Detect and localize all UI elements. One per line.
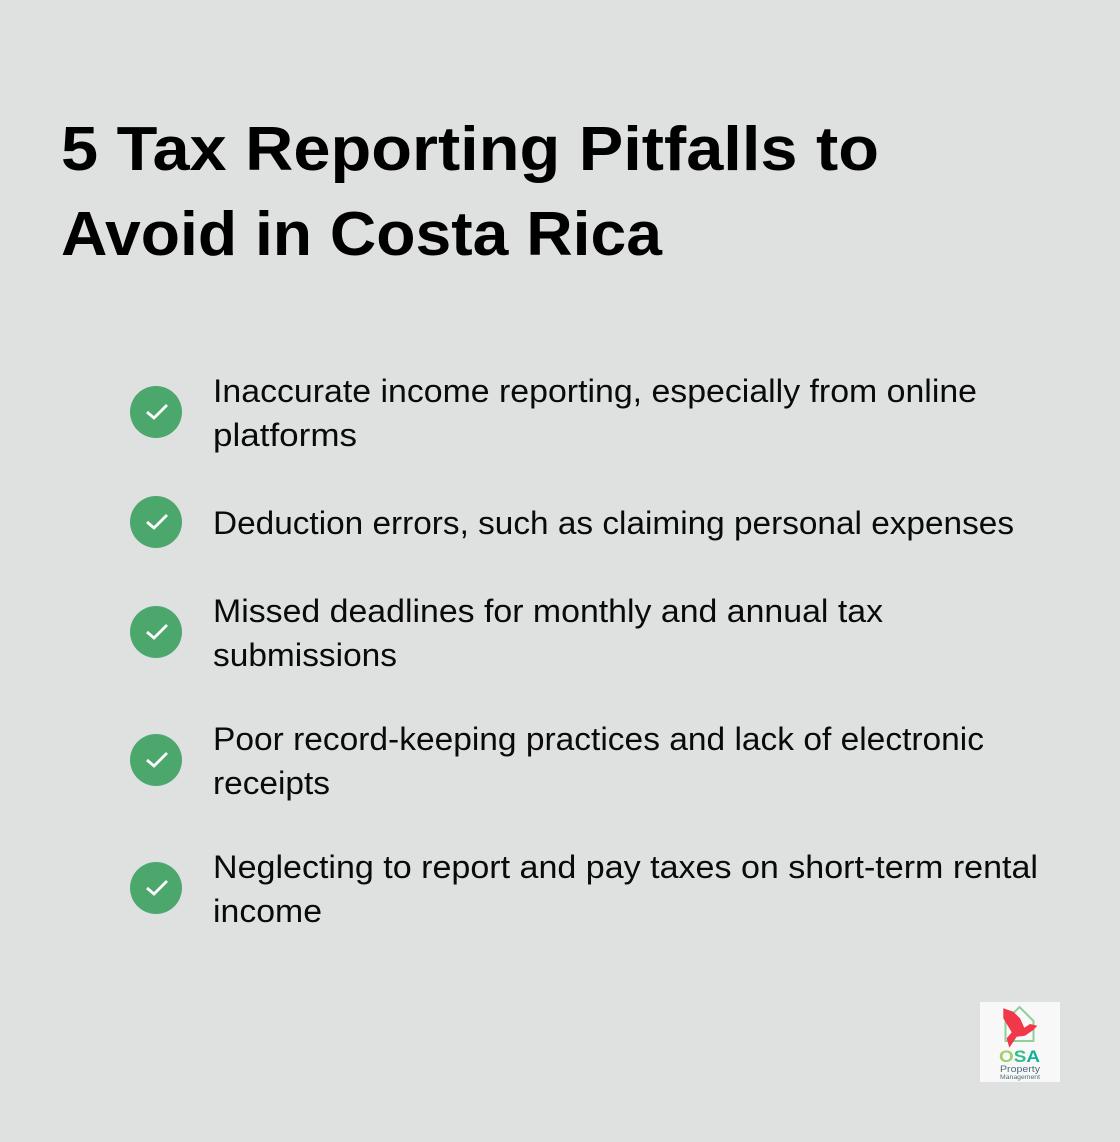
list item 1 (130, 373, 977, 453)
text: item 3: submissions (213, 637, 397, 673)
text: item 3 (213, 593, 883, 673)
icon: red bird (1003, 1008, 1037, 1048)
text: item 1 (213, 373, 977, 453)
list item 5 (130, 849, 1038, 929)
title: Avoid in Costa Rica (61, 200, 663, 269)
icon: house outline (1006, 1007, 1034, 1041)
text: item 1: platforms (213, 417, 357, 453)
title (61, 115, 879, 269)
text: item 5: income (213, 893, 322, 929)
icon: check 4 (130, 734, 182, 786)
text: item 2: Deduction errors, such as claiming personal expenses (213, 505, 1014, 541)
logo: OSA Property Management (980, 1002, 1060, 1082)
icon: check 3 (130, 606, 182, 658)
icon: check 1 (130, 386, 182, 438)
list item 4 (130, 721, 984, 801)
icon: check 2 (130, 496, 182, 548)
title: 5 Tax Reporting Pitfalls to (61, 115, 879, 184)
list item 2 (130, 496, 1014, 548)
text: item 5 (213, 849, 1038, 929)
text: item 5: Neglecting to report and pay taxes on short-term rental (213, 849, 1038, 885)
text: item 3: Missed deadlines for monthly and annual tax (213, 593, 883, 629)
icon: check 5 (130, 862, 182, 914)
logo wordmark: OSA (999, 1047, 1040, 1066)
logo wordmark (999, 1047, 1040, 1081)
list item 3 (130, 593, 883, 673)
text: item 4: receipts (213, 765, 330, 801)
logo wordmark: Management (1000, 1075, 1040, 1081)
text: item 4: Poor record-keeping practices and lack of electronic (213, 721, 984, 757)
logo wordmark: Property (1000, 1064, 1040, 1075)
text: item 1: Inaccurate income reporting, especially from online (213, 373, 977, 409)
text: item 4 (213, 721, 984, 801)
